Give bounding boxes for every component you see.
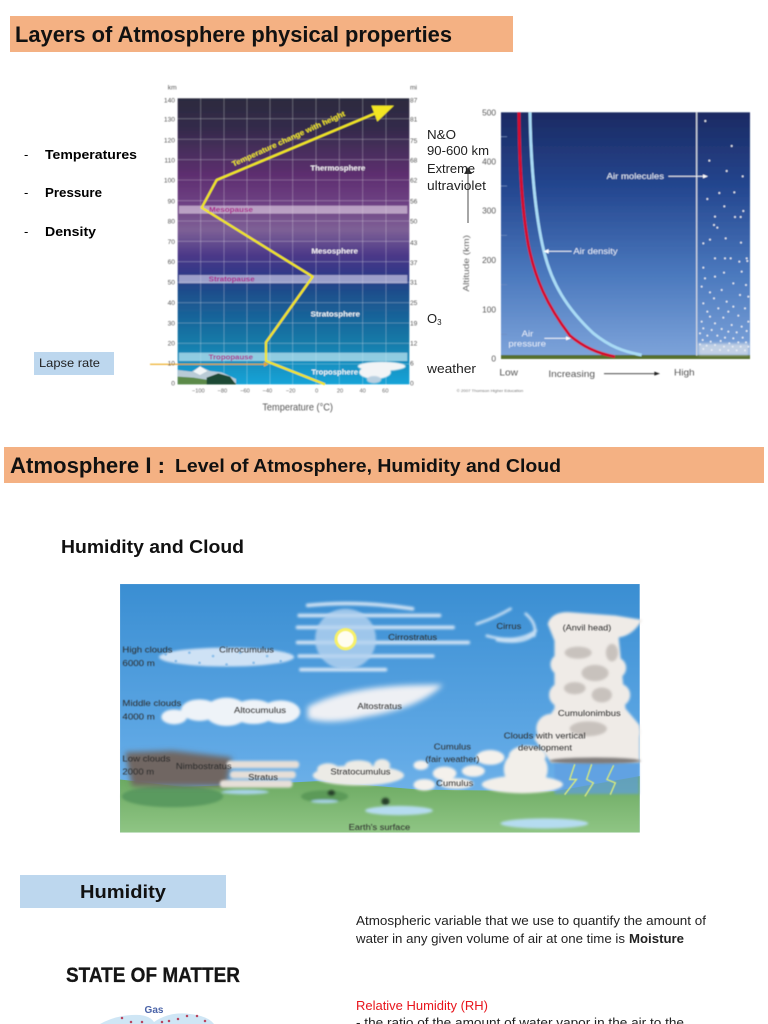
labels: left km axis: 50 <box>168 280 175 287</box>
labels: temperature axis: −100 <box>192 388 205 394</box>
diagram: gas state: Gas <box>145 1005 164 1016</box>
icon: mountains <box>178 366 236 384</box>
text: weather note: weather <box>426 361 477 376</box>
labels: altitude axis <box>482 108 507 364</box>
text block: physical properties list <box>24 147 137 239</box>
labels: increasing axis: High <box>674 367 695 377</box>
labels: right mile axis: 56 <box>410 198 418 205</box>
labels: cloud names: Altostratus <box>357 701 402 711</box>
heading: atmosphere I <box>4 447 764 483</box>
labels: cloud names: development <box>518 742 573 752</box>
labels: right mile axis: 62 <box>410 177 418 184</box>
labels: cloud names: (fair weather) <box>425 754 480 764</box>
labels: atmosphere layers: Stratopause <box>209 275 255 284</box>
stratocumulus <box>313 759 404 786</box>
labels: altitude axis: 0 <box>491 354 496 364</box>
labels: temperature axis: Temperature (°C) <box>262 402 333 413</box>
title: layers of atmosphere <box>10 16 513 52</box>
text block: physical properties list: Pressure <box>45 185 102 200</box>
heading: humidity and cloud: Humidity and Cloud <box>61 537 244 557</box>
labels: atmosphere layers: Tropopause <box>209 353 253 362</box>
text: ozone note: O <box>427 311 437 326</box>
text block: moisture definition: Moisture <box>629 931 684 946</box>
cumulus clouds <box>414 750 504 791</box>
labels: atmosphere layers: Troposphere <box>311 368 358 377</box>
labels: curve callouts: pressure <box>508 339 546 349</box>
arrow: lapse rate <box>150 362 269 367</box>
labels: atmosphere layers: Stratosphere <box>311 309 360 318</box>
labels: atmosphere layers: Mesopause <box>209 205 253 214</box>
text: thermosphere notes: Extreme <box>427 161 475 176</box>
heading: atmosphere I: Level of Atmosphere, Humidity and Cloud <box>175 455 561 476</box>
labels: left km axis: 100 <box>164 177 175 184</box>
labels: cloud names: High clouds <box>122 644 172 654</box>
callout: lapse rate <box>34 352 114 375</box>
nimbostratus and stratus <box>125 751 232 786</box>
dots: air molecules <box>698 121 749 355</box>
labels: cloud names: Cumulus <box>436 778 473 788</box>
icon: storm cloud <box>358 362 406 383</box>
text: ozone note: 3 <box>437 318 442 327</box>
labels: temperature axis: −40 <box>263 388 272 394</box>
labels: altitude axis: 300 <box>482 206 496 216</box>
labels: cloud names: Cirrus <box>496 621 521 631</box>
text: thermosphere notes: N&O <box>427 127 456 142</box>
labels: left km axis: 80 <box>168 218 175 225</box>
text block: physical properties list: - <box>24 185 28 200</box>
labels: right mile axis <box>410 85 418 388</box>
labels: temperature axis: −80 <box>218 388 227 394</box>
labels: temperature axis <box>192 388 388 413</box>
labels: right mile axis: 87 <box>410 97 418 104</box>
heading: humidity: Humidity <box>80 882 166 902</box>
labels: cloud names: Earth's surface <box>349 822 410 832</box>
text: thermosphere notes: 90-600 km <box>427 143 489 158</box>
cirrostratus <box>298 603 468 670</box>
labels: cloud names: 4000 m <box>122 711 155 721</box>
cirrus <box>477 609 536 641</box>
diagram: gas state <box>100 1005 214 1024</box>
labels: temperature axis: −20 <box>286 388 295 394</box>
text block: relative humidity <box>356 998 684 1024</box>
labels: cloud names: Nimbostratus <box>176 761 232 771</box>
chart: air pressure and density by altitude <box>457 108 750 393</box>
rain and lightning <box>554 764 639 796</box>
text block: relative humidity: Relative Humidity (RH) <box>356 998 488 1013</box>
labels: curve callouts: Air molecules <box>607 171 665 181</box>
labels: cloud names <box>122 621 621 832</box>
labels: altitude axis: 200 <box>482 255 496 265</box>
labels: right mile axis: mi <box>410 85 418 92</box>
labels: cloud names: Altocumulus <box>234 705 286 715</box>
text block: moisture definition: Atmospheric variable that we use to quantify the amount of <box>356 913 706 928</box>
labels: cloud names: Cumulonimbus <box>558 708 621 718</box>
labels: right mile axis: 0 <box>410 381 414 388</box>
text block: physical properties list: - <box>24 224 28 239</box>
text: copyright: © 2007 Thomson Higher Education <box>457 389 523 393</box>
labels: left km axis: 40 <box>168 300 175 307</box>
labels: left km axis: 120 <box>164 137 175 144</box>
labels: cloud names: Cumulus <box>434 742 471 752</box>
labels: left km axis: 130 <box>164 117 175 124</box>
labels: cloud names: Cirrocumulus <box>219 644 274 654</box>
labels: left km axis: 110 <box>164 157 175 164</box>
labels: right mile axis: 12 <box>410 341 418 348</box>
text block: physical properties list: - <box>24 147 28 162</box>
labels: right mile axis: 19 <box>410 320 418 327</box>
altostratus <box>308 685 443 722</box>
labels: cloud names: Clouds with vertical <box>504 731 586 741</box>
labels: atmosphere layers: Temperature change with height <box>230 109 347 168</box>
text block: physical properties list: Temperatures <box>45 147 137 162</box>
labels: left km axis: 140 <box>164 97 175 104</box>
curve: air density <box>530 112 642 355</box>
labels: curve callouts <box>508 171 708 349</box>
labels: left km axis: 90 <box>168 198 175 205</box>
cirrocumulus <box>159 648 294 667</box>
labels: right mile axis: 25 <box>410 300 418 307</box>
labels: left km axis <box>164 85 177 388</box>
icon: sun <box>315 609 376 670</box>
callout: lapse rate: Lapse rate <box>39 356 100 370</box>
labels: atmosphere layers: Thermosphere <box>310 164 365 173</box>
labels: left km axis: 30 <box>168 320 175 327</box>
heading: atmosphere I: Atmosphere I : <box>10 453 165 478</box>
labels: curve callouts: Air density <box>573 246 618 256</box>
labels: left km axis: km <box>168 85 177 92</box>
labels: left km axis: 10 <box>168 361 175 368</box>
labels: right mile axis: 50 <box>410 218 418 225</box>
land <box>120 776 640 833</box>
text: thermosphere notes: ultraviolet <box>427 178 486 193</box>
labels: curve callouts: Air <box>522 328 533 338</box>
labels: cloud names: 2000 m <box>122 767 154 777</box>
text block: moisture definition: water in any given volume of air at one time is <box>355 931 625 946</box>
labels: altitude axis: 100 <box>482 305 496 315</box>
labels: cloud names: Stratocumulus <box>330 767 391 777</box>
heading: state of matter: STATE OF MATTER <box>66 964 240 987</box>
labels: cloud names: Middle clouds <box>122 698 181 708</box>
labels: altitude axis: 400 <box>482 156 496 166</box>
line: temperature change <box>202 106 394 384</box>
labels: atmosphere layers: Mesosphere <box>311 246 358 255</box>
labels: cloud names: Low clouds <box>122 754 170 764</box>
labels: increasing axis: Increasing <box>548 369 595 379</box>
labels: temperature axis: 0 <box>315 388 318 394</box>
labels: increasing axis <box>499 367 695 379</box>
altocumulus <box>161 698 300 726</box>
cumulus vertical cloud <box>482 746 563 793</box>
labels: right mile axis: 68 <box>410 157 418 164</box>
labels: cloud names: Cirrostratus <box>388 632 437 642</box>
labels: temperature axis: 40 <box>360 388 366 394</box>
labels: right mile axis: 43 <box>410 240 418 247</box>
text: thermosphere notes <box>427 127 489 193</box>
labels: temperature axis: 20 <box>337 388 343 394</box>
labels: right mile axis: 75 <box>410 138 418 145</box>
heading: humidity <box>20 875 226 908</box>
curve: air pressure <box>519 112 615 357</box>
labels: temperature axis: −60 <box>240 388 250 394</box>
labels: temperature axis: 60 <box>382 388 388 394</box>
diagram: cloud types <box>120 584 642 833</box>
labels: increasing axis: Low <box>499 367 518 377</box>
labels: left km axis: 60 <box>168 259 175 266</box>
labels: atmosphere layers <box>209 109 365 377</box>
labels: cloud names: 6000 m <box>122 658 155 668</box>
anvil cloud <box>534 612 642 764</box>
text block: physical properties list: Density <box>45 224 97 239</box>
labels: left km axis: 0 <box>171 381 175 388</box>
labels: right mile axis: 81 <box>410 117 418 124</box>
labels: left km axis: 70 <box>168 239 175 246</box>
labels: cloud names: Stratus <box>248 772 278 782</box>
chart: temperature by altitude <box>150 85 418 413</box>
labels: cloud names: (Anvil head) <box>563 623 611 633</box>
labels: right mile axis: 6 <box>410 361 414 368</box>
arrow: altitude indicator <box>464 167 472 223</box>
labels: left km axis: 20 <box>168 341 175 348</box>
label: altitude axis title: Altitude (km) <box>461 235 471 292</box>
labels: right mile axis: 37 <box>410 260 418 267</box>
text block: moisture definition <box>355 913 706 946</box>
labels: altitude axis: 500 <box>482 108 496 118</box>
title: layers of atmosphere: Layers of Atmosphere physical properties <box>15 22 452 47</box>
labels: right mile axis: 31 <box>410 280 418 287</box>
